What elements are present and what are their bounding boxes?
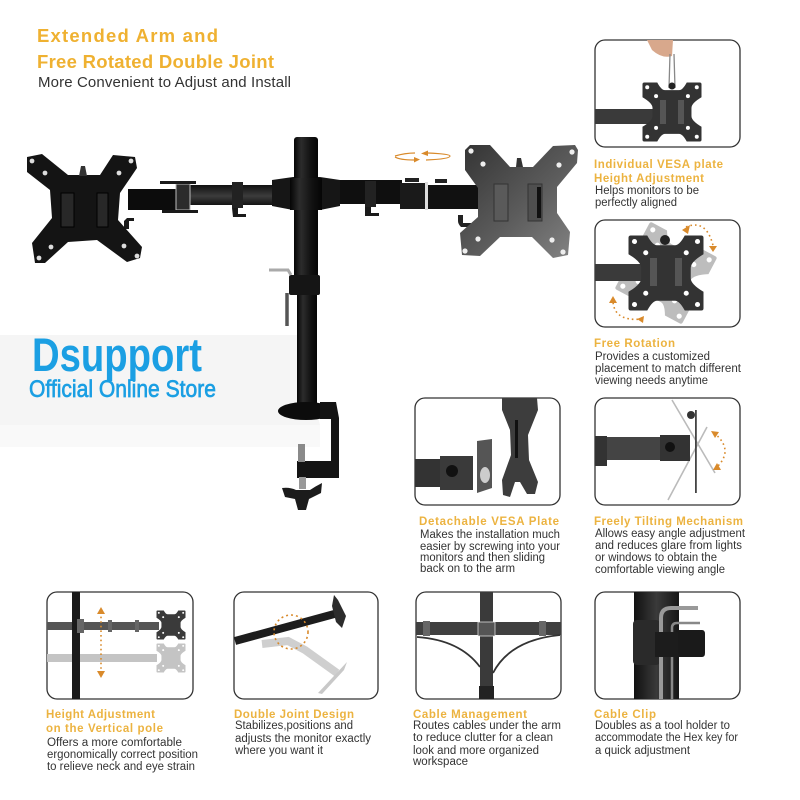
caption: tilting: Allows easy angle adjustment <box>595 528 746 540</box>
right VESA plate <box>460 145 578 258</box>
left VESA plate <box>27 154 142 263</box>
title: Extended Arm and <box>37 25 218 46</box>
caption: tilting <box>594 516 746 576</box>
caption: cable management: look and more organized <box>413 745 539 757</box>
caption: cable clip: Doubles as a tool holder to <box>595 720 730 732</box>
caption: tilting: comfortable viewing angle <box>595 564 725 576</box>
panel: VESA plate height <box>595 40 740 147</box>
caption: cable management: Cable Management <box>413 709 527 721</box>
left arm <box>124 181 290 229</box>
clamp base <box>278 402 334 420</box>
caption: height adjustment: Height Adjustment <box>46 709 155 721</box>
panel: cable management <box>416 592 561 700</box>
store logo <box>29 328 216 403</box>
caption: cable clip: accommodate the Hex key for <box>595 732 738 744</box>
caption: cable clip: a quick adjustment <box>595 745 691 757</box>
caption: height adjustment: on the Vertical pole <box>46 723 163 735</box>
panel: double joint <box>234 592 378 699</box>
store logo: Official Online Store <box>29 376 216 403</box>
caption: height adjustment <box>46 709 198 773</box>
title: Free Rotated Double Joint <box>37 51 274 72</box>
main product: dual monitor arm <box>27 137 578 510</box>
caption: detachable VESA: Makes the installation much <box>420 529 560 541</box>
caption: double joint: where you want it <box>234 745 324 757</box>
panel: cable clip <box>595 592 740 699</box>
clamp screw <box>298 444 305 462</box>
panel: height adjustment <box>47 592 193 699</box>
caption: height adjustment: Offers a more comfortable <box>47 737 182 749</box>
caption: double joint <box>234 709 371 757</box>
height collar <box>289 275 320 295</box>
panel: free rotation <box>595 220 740 327</box>
caption: cable management: Routes cables under the arm <box>413 720 561 732</box>
caption: detachable VESA: back on to the arm <box>420 563 515 575</box>
pole upper <box>294 137 318 287</box>
right arm <box>318 178 480 227</box>
caption: free rotation: viewing needs anytime <box>595 375 708 387</box>
caption: cable management: to reduce clutter for a clean <box>413 732 553 744</box>
caption: VESA plate height: Individual VESA plate <box>594 159 723 171</box>
caption: tilting: and reduces glare from lights <box>595 540 742 552</box>
caption: VESA plate height <box>594 159 723 209</box>
store logo: Dsupport <box>32 328 202 381</box>
caption: tilting: or windows to obtain the <box>595 552 717 564</box>
subtitle: More Convenient to Adjust and Install <box>38 74 291 91</box>
caption: detachable VESA: Detachable VESA Plate <box>419 516 559 528</box>
caption: tilting: Freely Tilting Mechanism <box>594 516 743 528</box>
caption: height adjustment: to relieve neck and eye strain <box>47 761 195 773</box>
caption: double joint: Double Joint Design <box>234 709 354 721</box>
caption: free rotation: Provides a customized <box>595 351 710 363</box>
caption: height adjustment: ergonomically correct position <box>47 749 198 761</box>
caption: free rotation: placement to match different <box>595 363 742 375</box>
clamp knob <box>282 483 322 510</box>
caption: cable clip: Cable Clip <box>594 709 656 721</box>
caption: double joint: adjusts the monitor exactly <box>235 733 371 745</box>
panel: tilting <box>595 398 740 505</box>
icon: rotation arrows <box>395 150 450 162</box>
caption: detachable VESA: easier by screwing into your <box>420 541 560 553</box>
caption: VESA plate height: Height Adjustment <box>594 173 704 185</box>
desk <box>0 335 350 450</box>
caption: free rotation <box>594 338 742 387</box>
caption: cable management: workspace <box>412 756 468 768</box>
panel: detachable VESA <box>415 398 560 505</box>
caption: free rotation: Free Rotation <box>594 338 675 350</box>
pole lower <box>297 287 317 410</box>
caption: VESA plate height: perfectly aligned <box>595 197 677 209</box>
caption: cable clip <box>594 709 738 757</box>
caption: detachable VESA: monitors and then sliding <box>420 552 545 564</box>
caption: cable management <box>412 709 561 768</box>
pole joint <box>272 177 340 210</box>
caption: VESA plate height: Helps monitors to be <box>595 185 699 197</box>
hex handle <box>269 270 291 275</box>
title <box>37 25 274 72</box>
caption: double joint: Stabilizes,positions and <box>235 720 353 732</box>
caption: detachable VESA <box>419 516 560 575</box>
